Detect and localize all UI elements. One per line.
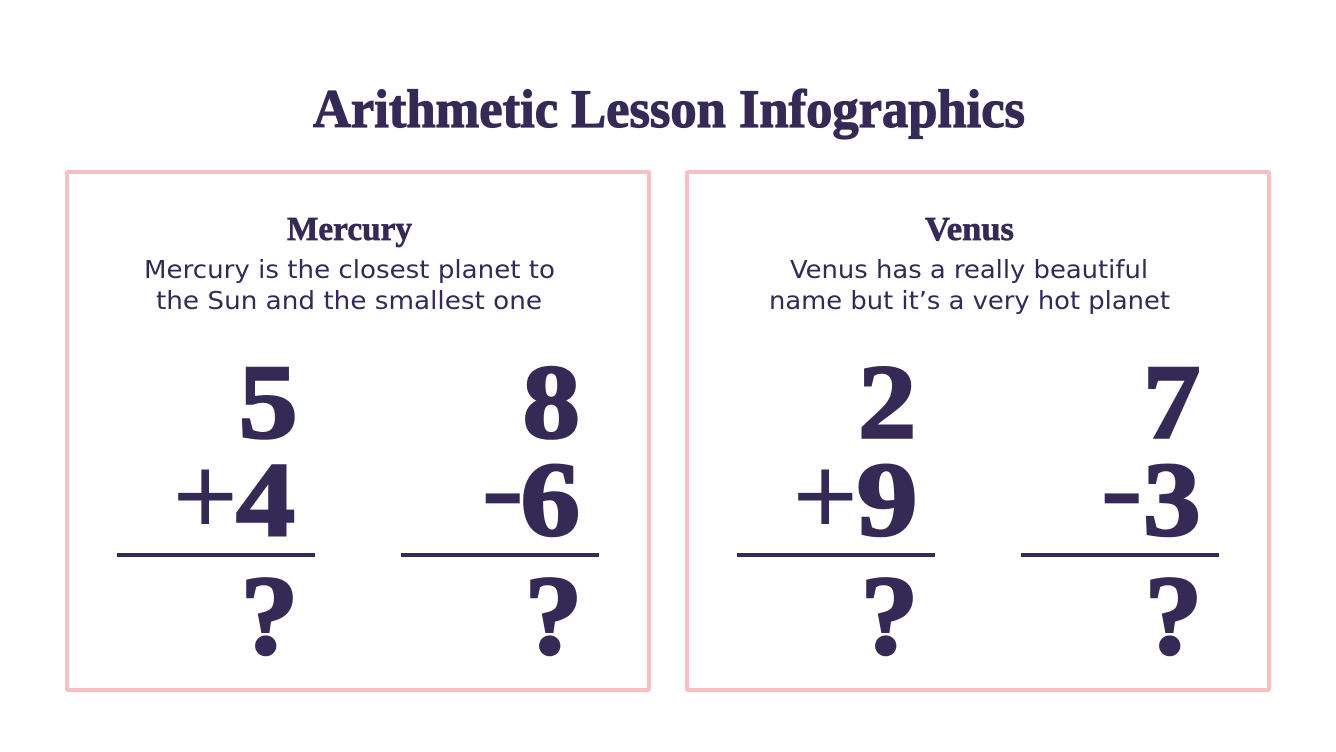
equation: 5 + 4: + [174, 435, 237, 559]
text: Mercury description [144, 255, 555, 315]
equation: 7 - 3: ? [1144, 554, 1202, 678]
text: Mercury description: the Sun and the smallest one [156, 286, 542, 315]
equation: 2 + 9: + [794, 435, 857, 559]
text: Mercury description: Mercury is the closest planet to [144, 255, 555, 284]
equation: 7 - 3: 3 [1143, 441, 1201, 558]
equation: 2 + 9 [737, 344, 935, 678]
text: Venus description: name but it’s a very hot planet [769, 286, 1170, 315]
equation: 2 + 9: 9 [857, 441, 918, 558]
panel: Venus [687, 172, 1269, 690]
equation: 5 + 4: 4 [236, 441, 295, 558]
heading: Mercury: Mercury [287, 211, 412, 248]
equation: 8 - 6 [401, 344, 599, 678]
text: Venus description: Venus has a really beautiful [790, 255, 1148, 284]
equation: 7 - 3: 7 [1143, 344, 1200, 460]
heading: Venus: Venus [925, 211, 1014, 248]
equation: 2 + 9: ? [860, 554, 918, 678]
equation: 8 - 6: - [481, 414, 524, 558]
panel border: Venus [687, 172, 1269, 690]
equation: 7 - 3 [1021, 344, 1219, 678]
equation: 8 - 6: 8 [523, 344, 580, 460]
equation: 5 + 4: 5 [239, 344, 298, 460]
panel: Mercury [67, 172, 649, 690]
equation: 2 + 9: 2 [858, 344, 916, 460]
equation: 8 - 6: ? [524, 554, 582, 678]
panel border: Mercury [67, 172, 649, 690]
text: Venus description [769, 255, 1170, 315]
equation: 7 - 3: - [1100, 414, 1143, 558]
title: Arithmetic Lesson Infographics [313, 79, 1025, 139]
equation: 8 - 6: 6 [520, 441, 580, 558]
equation: 5 + 4 [117, 344, 315, 678]
equation: 5 + 4: ? [240, 554, 298, 678]
